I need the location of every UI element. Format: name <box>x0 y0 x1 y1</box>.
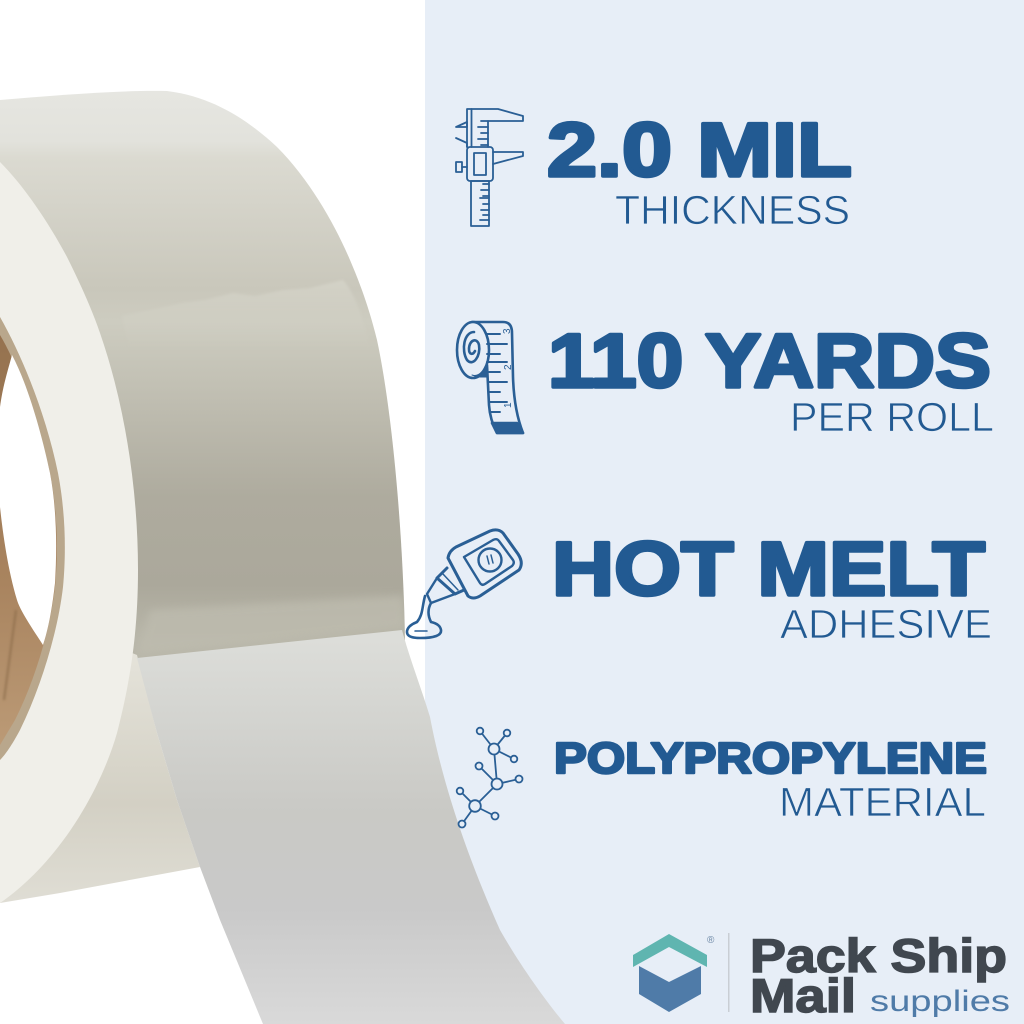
panel: specifications <box>425 0 1024 1024</box>
logo roof <box>633 934 707 967</box>
label: MATERIAL: MATERIAL <box>779 779 986 825</box>
cardboard core rim <box>0 317 65 760</box>
photo: roll of white polypropylene tape <box>0 91 405 903</box>
wordmark supplies: supplies <box>870 985 1010 1018</box>
wavy wrinkle highlight <box>155 282 402 622</box>
heading: POLYPROPYLENE: POLYPROPYLENE <box>554 734 987 783</box>
registered mark: ® <box>707 935 715 946</box>
core inner seam <box>4 610 16 700</box>
icon: molecule <box>457 728 522 828</box>
unwinding tape strip <box>137 630 565 1024</box>
icon: glue bottle <box>407 530 521 638</box>
logo divider <box>728 933 730 1012</box>
logo: Pack Ship Mail supplies <box>633 929 1010 1022</box>
core hole <box>0 355 56 645</box>
heading: HOT MELT: HOT MELT <box>552 527 985 612</box>
icon: tape measure: 3 <box>502 328 513 334</box>
icon: tape measure: 1 <box>503 402 514 408</box>
icon: tape measure: 2 <box>503 364 514 370</box>
logo box <box>639 966 701 1012</box>
heading: 2.0 MIL: 2.0 MIL <box>547 108 852 193</box>
wordmark line two: Mail <box>750 969 856 1022</box>
heading: 110 YARDS: 110 YARDS <box>548 319 991 404</box>
roll underside <box>0 640 200 903</box>
icon: tape measure <box>457 322 523 433</box>
tape roll outer surface <box>0 91 405 665</box>
label: ADHESIVE: ADHESIVE <box>780 601 992 647</box>
icon: caliper <box>456 109 523 226</box>
label: PER ROLL: PER ROLL <box>790 394 994 440</box>
wordmark line one: Pack Ship <box>750 929 1007 982</box>
roll front face ring <box>0 162 138 903</box>
label: THICKNESS: THICKNESS <box>615 187 850 233</box>
core interior <box>0 335 57 745</box>
